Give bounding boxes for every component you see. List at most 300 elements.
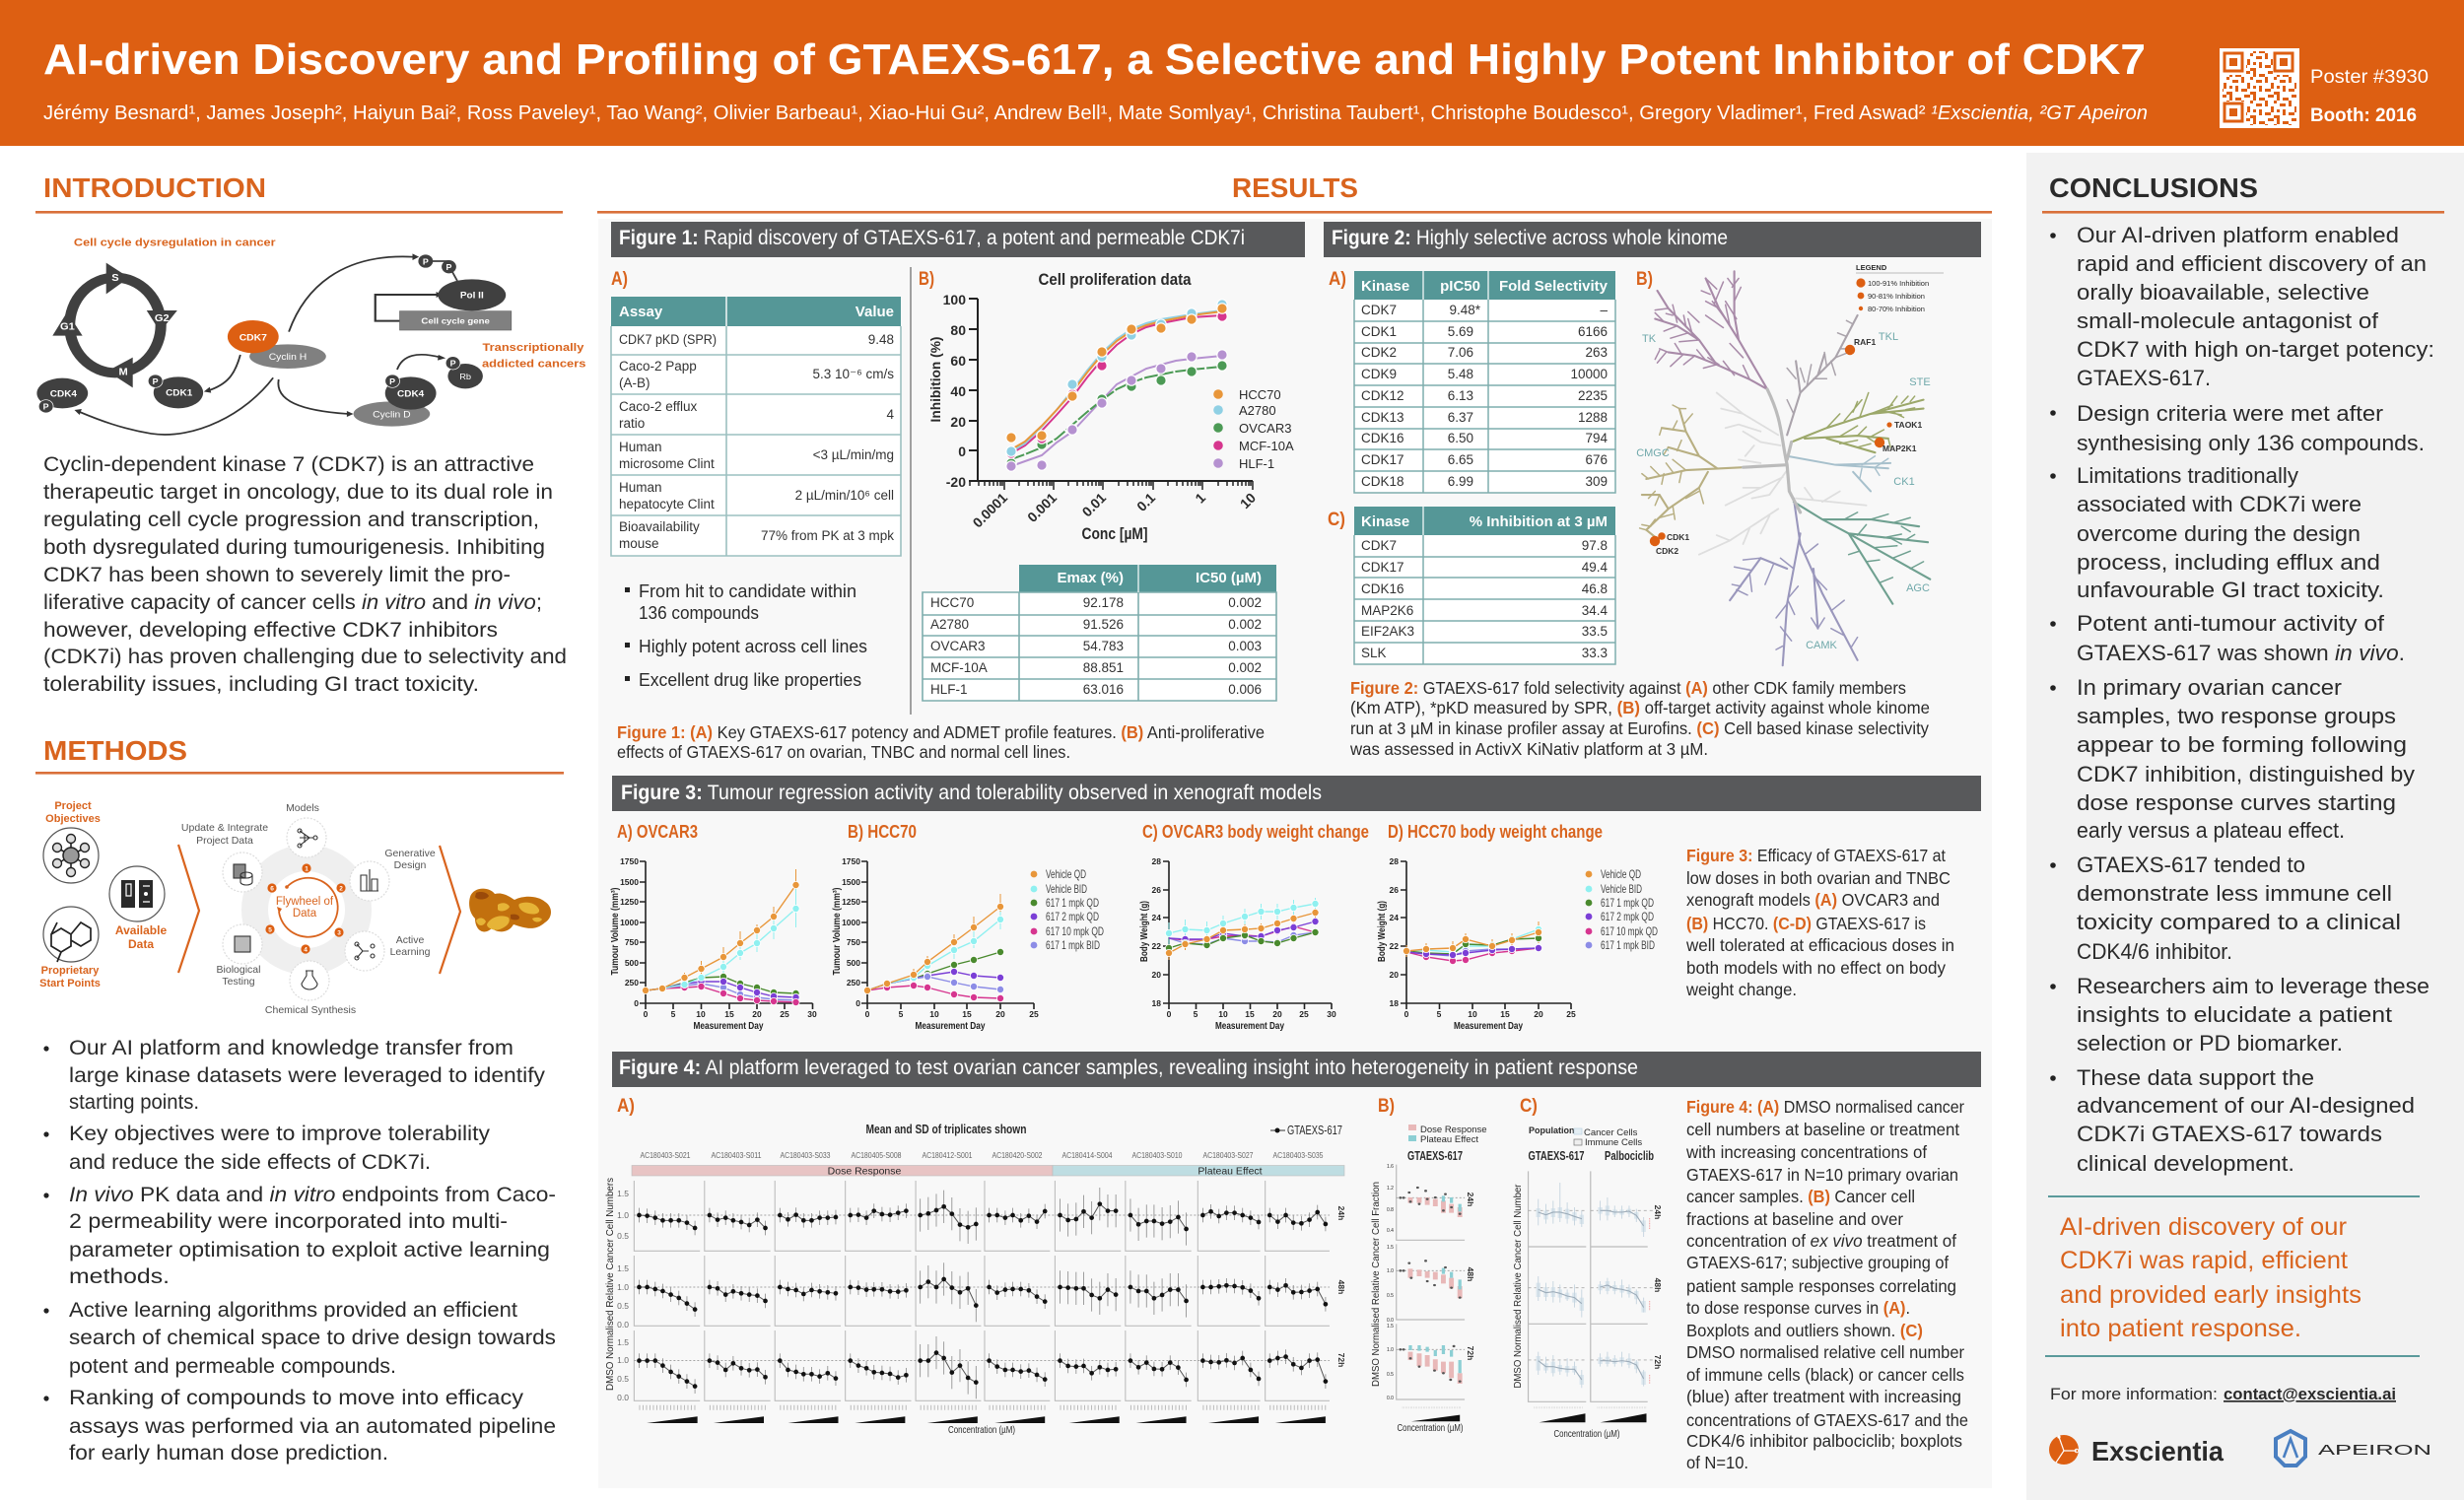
conclusions bullet list: toxicity compared to a clinical (2077, 910, 2401, 934)
kinase complexes: Cell cycle gene (421, 316, 490, 326)
flywheel step labels: Update & Integrate (181, 822, 268, 834)
flywheel: 4 (304, 946, 308, 954)
sample names: AC180403-S027 (1202, 1150, 1254, 1160)
figure 4 caption: GTAEXS-617 in N=10 primary ovarian (1686, 1165, 1958, 1185)
table: emax ic50: A2780 (930, 617, 969, 632)
chart: HCC70 tumour volume: 15 (962, 1009, 972, 1019)
methods bullet list: and reduce the side effects of CDK7i. (69, 1151, 431, 1174)
legend: tumour charts: 617 10 mpk QD (1046, 924, 1104, 938)
figure 2 header (1324, 222, 1981, 257)
table: emax ic50: Emax (%) (1057, 570, 1124, 586)
family labels (1636, 331, 1931, 651)
kinase complexes: Cyclin H (269, 352, 307, 363)
figure 4 caption: (blue) after treatment with increasing (1686, 1387, 1961, 1406)
figure 2 header: Figure 2: Highly selective across whole kinome (1332, 227, 1728, 249)
chart: HCC70 tumour volume: 0 (856, 998, 860, 1008)
table: kinase selectivity: 6.50 (1448, 431, 1473, 445)
callout: key message (2045, 1195, 2420, 1357)
table: emax ic50: 54.783 (1083, 639, 1124, 653)
figure 4 caption: GTAEXS-617; subjective grouping of (1686, 1253, 1949, 1272)
chart: OVCAR3 body weight: 10 (1218, 1009, 1228, 1019)
legend: body weight charts: 617 1 mpk BID (1601, 938, 1655, 952)
chart: cell proliferation: 80 (950, 322, 966, 338)
table: kinase selectivity: CDK13 (1361, 410, 1404, 425)
figure 4 header (612, 1052, 1981, 1087)
conclusions bullet list: samples, two response groups (2077, 704, 2396, 728)
chart: OVCAR3 body weight: 26 (1152, 885, 1161, 895)
boxplots B: Concentration (µM) (1398, 1423, 1463, 1434)
boxplots B: 0.5 (1387, 1293, 1394, 1299)
logo: Exscientia: Exscientia (2091, 1436, 2224, 1466)
chart: cell proliferation: 0.0001 (970, 490, 1010, 530)
chart: HCC70 body weight: Measurement Day (1454, 1021, 1523, 1032)
methods bullet list: Active learning algorithms provided an efficient (69, 1299, 517, 1322)
table: assay values: Caco-2 Papp (619, 359, 697, 374)
arrow: chevron right (440, 846, 460, 974)
table: kinase selectivity: 676 (1585, 452, 1608, 467)
figure 4 caption: DMSO normalised relative cell number (1686, 1342, 1964, 1362)
figure 3 caption: low doses in both ovarian and TNBC (1686, 868, 1951, 888)
chart: OVCAR3 tumour volume: 500 (625, 958, 639, 968)
key points: Highly potent across cell lines (639, 637, 867, 656)
hit kinases: CDK2 (1656, 546, 1678, 556)
figure 1 header: Figure 1: Rapid discovery of GTAEXS-617, a potent and permeable CDK7i (619, 227, 1245, 249)
figure 4 caption: with increasing concentrations of (1685, 1142, 1927, 1162)
methods bullet list: Key objectives were to improve tolerability (69, 1123, 491, 1145)
chart legend: HLF-1 (1239, 456, 1274, 471)
label C: C) (1328, 510, 1345, 530)
kinase complexes: P (450, 359, 456, 369)
flywheel step labels: Biological (217, 964, 260, 976)
response group bands (632, 1165, 1344, 1177)
hit kinases: MAP2K1 (1882, 443, 1917, 453)
chart: HCC70 body weight: 28 (1390, 856, 1399, 866)
chart: HCC70 tumour volume: 1000 (842, 918, 860, 927)
conclusions bullet list: Researchers aim to leverage these (2077, 974, 2430, 998)
boxplots C: 24h (1653, 1205, 1663, 1219)
methods bullet list: methods. (69, 1265, 170, 1288)
chart: OVCAR3 tumour volume: 250 (625, 978, 639, 988)
table: assay values: 77% from PK at 3 mpk (761, 528, 894, 543)
boxplot titles C: Palbociclib (1605, 1148, 1654, 1163)
facet axis labels: Concentration (µM) (948, 1424, 1015, 1436)
facet axis labels: 0.0 (617, 1320, 629, 1330)
diagram title: Cell cycle dysregulation in cancer (74, 236, 276, 248)
proprietary start points: Start Points (39, 978, 101, 989)
chart: HCC70 tumour volume: 5 (899, 1009, 904, 1019)
label B: B) (919, 269, 934, 290)
chart: HCC70 body weight: 15 (1500, 1009, 1510, 1019)
sub-headings (617, 822, 1603, 842)
chart: HCC70 tumour volume: 10 (929, 1009, 939, 1019)
figure 1 caption (617, 722, 1265, 762)
available data (109, 866, 167, 951)
logo: Apeiron: APEIRON (2318, 1442, 2431, 1459)
proprietary start points (39, 907, 101, 989)
kinase complexes: P (43, 402, 49, 412)
legend: body weight charts: Vehicle QD (1601, 867, 1641, 881)
table: percent inhibition: 33.5 (1582, 624, 1608, 639)
flywheel: Data (293, 908, 317, 920)
key points: 136 compounds (639, 603, 759, 623)
kinase complexes: CDK4 (50, 389, 78, 399)
conclusions bullet list: Design criteria were met after (2077, 401, 2383, 426)
table: percent inhibition: CDK7 (1361, 538, 1397, 553)
hit kinases: TAOK1 (1894, 420, 1922, 430)
chart: cell proliferation (927, 270, 1294, 543)
chart: HCC70 body weight (1377, 856, 1576, 1032)
flywheel: 1 (305, 865, 308, 873)
boxplots B: 0.0 (1387, 1396, 1394, 1401)
contact line: For more information: (2050, 1385, 2218, 1403)
table: emax ic50: 0.006 (1228, 682, 1262, 697)
table: emax ic50: IC50 (µM) (1196, 570, 1262, 586)
contact line (2050, 1385, 2396, 1403)
flywheel step labels: Chemical Synthesis (265, 1004, 356, 1016)
methods bullet list: assays was performed via an automated pipeline (69, 1415, 556, 1438)
methods bullet list: search of chemical space to drive design towards (69, 1327, 556, 1349)
chart: HCC70 tumour volume: Tumour Volume (mm³) (832, 887, 843, 976)
table: percent inhibition: 49.4 (1582, 560, 1608, 575)
hit kinases: CDK1 (1667, 532, 1689, 542)
flywheel step labels: Learning (390, 946, 431, 958)
chart: OVCAR3 tumour volume: 1000 (620, 918, 639, 927)
table: emax ic50: MCF-10A (930, 660, 988, 675)
table: kinase selectivity: CDK17 (1361, 452, 1404, 467)
chart: OVCAR3 tumour volume: 1750 (620, 856, 639, 866)
table: assay values: 9.48 (868, 332, 894, 347)
legend: tumour charts: Vehicle BID (1046, 882, 1087, 896)
figure 3 header: Figure 3: Tumour regression activity and tolerability observed in xenograft models (621, 782, 1322, 804)
facet axis labels: 0.5 (617, 1231, 629, 1241)
table: kinase selectivity: 2235 (1578, 388, 1608, 403)
chart: cell proliferation: 0.01 (1079, 490, 1109, 519)
table: emax ic50: 0.002 (1228, 660, 1262, 675)
chart: OVCAR3 tumour volume: 0 (634, 998, 639, 1008)
conclusions bullet list: early versus a plateau effect. (2077, 818, 2345, 843)
chart: HCC70 body weight: Body Weight (g) (1377, 901, 1388, 962)
facet axis labels: 0.5 (617, 1301, 629, 1311)
boxplots B: 0.0 (1387, 1318, 1394, 1324)
kinase complexes: CDK7 (240, 333, 267, 343)
hit kinases (1650, 337, 1922, 556)
kinome legend: 90-81% Inhibition (1868, 292, 1925, 301)
chart: cell proliferation: Conc [µM] (1082, 524, 1147, 543)
boxplot legend C: Cancer Cells (1584, 1127, 1638, 1138)
table: percent inhibition (1354, 507, 1615, 664)
methods bullet list: for early human dose prediction. (69, 1442, 388, 1465)
conclusions bullet list: insights to elucidate a patient (2077, 1002, 2392, 1027)
table: percent inhibition: MAP2K6 (1361, 603, 1413, 618)
conclusions bullet list: CDK7 inhibition, distinguished by (2077, 762, 2415, 786)
table: assay values: 5.3 10⁻⁶ cm/s (813, 367, 894, 381)
table: emax ic50: 63.016 (1083, 682, 1124, 697)
facet chart title: Mean and SD of triplicates shown (865, 1122, 1027, 1136)
transcriptionally addicted label (482, 342, 585, 370)
table: kinase selectivity: 5.48 (1448, 367, 1473, 381)
legend: body weight charts (1586, 867, 1658, 952)
response group bands: Dose Response (828, 1165, 902, 1177)
chart: OVCAR3 body weight: 18 (1152, 998, 1161, 1008)
table: kinase selectivity: 6.99 (1448, 474, 1473, 489)
chart: cell proliferation: Inhibition (%) (927, 337, 943, 422)
chart: OVCAR3 body weight: 15 (1245, 1009, 1255, 1019)
table: assay values: CDK7 pKD (SPR) (619, 332, 717, 347)
figure 1 caption: Figure 1: (A) Key GTAEXS-617 potency and ADMET profile features. (B) Anti-proliferative (617, 722, 1265, 742)
boxplots B: 0.8 (1387, 1207, 1394, 1213)
boxplot legend C: Population: (1529, 1125, 1577, 1135)
chart: OVCAR3 body weight: 22 (1152, 941, 1161, 951)
introduction paragraph: CDK7 has been shown to severely limit the pro- (43, 564, 511, 586)
legend: body weight charts: 617 10 mpk QD (1601, 924, 1658, 938)
table: percent inhibition: EIF2AK3 (1361, 624, 1414, 639)
sub-headings: B) HCC70 (848, 822, 917, 842)
table: assay values: microsome Clint (619, 456, 715, 471)
figure 3 header (612, 776, 1981, 811)
kinase complexes: P (153, 376, 159, 386)
family labels: AGC (1906, 582, 1930, 594)
boxplots B: 48h (1466, 1267, 1475, 1281)
table: assay values: Bioavailability (619, 519, 700, 534)
figure 4 caption: CDK4/6 inhibitor palbociclib; boxplots (1686, 1431, 1962, 1451)
conclusions bullet list: appear to be forming following (2077, 732, 2407, 757)
figure 4 caption: cell numbers at baseline or treatment (1686, 1120, 1959, 1139)
icon: molecule surface (469, 889, 551, 931)
legend: tumour charts: 617 1 mpk BID (1046, 938, 1100, 952)
figure 1 header (611, 222, 1305, 257)
flywheel: 3 (337, 930, 341, 936)
table: assay values: mouse (619, 536, 659, 551)
conclusions bullet list: GTAEXS-617 was shown in vivo. (2077, 641, 2405, 665)
chart: HCC70 tumour volume: Measurement Day (915, 1021, 986, 1032)
chart: HCC70 body weight: 10 (1468, 1009, 1477, 1019)
facet axis labels: 1.0 (617, 1210, 629, 1220)
table: emax ic50: 91.526 (1083, 617, 1124, 632)
chart: OVCAR3 body weight: 25 (1299, 1009, 1309, 1019)
conclusions bullet list: GTAEXS-617 tended to (2077, 852, 2305, 877)
table: assay values: 2 µL/min/10⁶ cell (795, 488, 894, 503)
boxplots B: 0.4 (1387, 1228, 1394, 1234)
conclusions bullet list: advancement of our AI-designed (2077, 1093, 2415, 1118)
chart: OVCAR3 tumour volume: 10 (696, 1009, 706, 1019)
cell cycle ring: S (111, 272, 119, 284)
label B: B) (1378, 1096, 1395, 1117)
callout: key message: CDK7i was rapid, efficient (2060, 1247, 2348, 1274)
table: emax ic50: 0.002 (1228, 595, 1262, 610)
figure 4 caption: concentration of ex vivo treatment of (1686, 1231, 1956, 1251)
chart legend (1213, 387, 1294, 471)
table: kinase selectivity: 1288 (1578, 410, 1608, 425)
table: kinase selectivity: CDK18 (1361, 474, 1404, 489)
chart: HCC70 tumour volume: 750 (847, 937, 860, 947)
conclusions bullet list: clinical development. (2077, 1151, 2294, 1176)
introduction paragraph: therapeutic target in oncology, due to its dual role in (43, 481, 553, 504)
conclusions bullet list: orally bioavailable, selective (2077, 280, 2369, 305)
facet axis labels: 1.0 (617, 1355, 629, 1365)
table: assay values: 4 (886, 407, 894, 422)
facet plots (634, 1181, 1330, 1423)
boxplots B: 1.6 (1387, 1164, 1394, 1170)
hit kinases: RAF1 (1854, 337, 1876, 347)
figure 4 caption: to dose response curves in (A). (1686, 1298, 1910, 1318)
cell cycle ring: G2 (155, 312, 170, 324)
facet axis labels: 48h (1336, 1280, 1346, 1294)
response group bands: Plateau Effect (1198, 1165, 1263, 1177)
boxplots B: 1.0 (1387, 1347, 1394, 1353)
conclusions bullet list: dose response curves starting (2077, 790, 2396, 815)
table: kinase selectivity: 794 (1585, 431, 1608, 445)
kinase complexes: P (389, 376, 395, 386)
conclusions bullet list: demonstrate less immune cell (2077, 881, 2392, 906)
table: kinase selectivity: Kinase (1361, 278, 1409, 295)
introduction paragraph: liferative capacity of cancer cells in vitro and in vivo; (43, 591, 542, 614)
conclusions bullet list: Potent anti-tumour activity of (2077, 611, 2385, 636)
chart: cell proliferation: 0 (958, 443, 966, 459)
boxplots C: DMSO Normalised Relative Cancer Cell Number (1513, 1184, 1524, 1388)
table: kinase selectivity: 9.48* (1449, 303, 1481, 317)
chart: cell proliferation: Cell proliferation data (1039, 270, 1192, 289)
table: emax ic50: HLF-1 (930, 682, 968, 697)
table: kinase selectivity: – (1600, 303, 1608, 317)
table: assay values: Human (619, 440, 662, 454)
chart: cell proliferation: 0.1 (1133, 490, 1158, 514)
callout: key message: into patient response. (2060, 1315, 2301, 1342)
table: kinase selectivity: 5.69 (1448, 324, 1473, 339)
figure 4 caption: of N=10. (1686, 1453, 1748, 1472)
conclusions bullet list (2050, 223, 2434, 1176)
chart: OVCAR3 body weight: 20 (1272, 1009, 1282, 1019)
family labels: CAMK (1806, 640, 1838, 651)
project objectives (43, 800, 101, 883)
table: percent inhibition: 97.8 (1582, 538, 1608, 553)
chart: HCC70 body weight: 5 (1437, 1009, 1442, 1019)
table: assay values (611, 297, 901, 556)
facet legend (1270, 1123, 1342, 1137)
key points: From hit to candidate within (639, 581, 856, 601)
chart: cell proliferation: 1 (1192, 490, 1208, 507)
table: assay values: Assay (619, 304, 663, 320)
figure 3 caption (1685, 846, 1954, 999)
boxplot titles C: GTAEXS-617 (1528, 1148, 1585, 1163)
kinase complexes: Rb (459, 372, 471, 381)
sample names (641, 1150, 1324, 1160)
transcriptionally addicted label: addicted cancers (482, 358, 585, 370)
conclusions bullet list: Limitations traditionally (2077, 463, 2298, 488)
QR code (2220, 48, 2299, 128)
boxplots B: 1.0 (1387, 1268, 1394, 1274)
kinase complexes: P (423, 257, 429, 266)
chart: OVCAR3 tumour volume: 1500 (620, 877, 639, 887)
chart legend: OVCAR3 (1239, 421, 1291, 436)
table: emax ic50: OVCAR3 (930, 639, 986, 653)
table: assay values: ratio (619, 416, 645, 431)
sample names: AC180403-S010 (1131, 1150, 1183, 1160)
methods bullet list (43, 1037, 556, 1465)
kinome legend: 80-70% Inhibition (1868, 305, 1925, 313)
conclusions bullet list: process, including efflux and (2077, 550, 2380, 575)
boxplots C: 72h (1653, 1355, 1663, 1369)
facet axis labels: 1.5 (617, 1263, 629, 1273)
chart: OVCAR3 body weight: 28 (1152, 856, 1161, 866)
family labels: TKL (1879, 331, 1898, 343)
table: assay values: Value (856, 304, 894, 320)
callout: key message: and provided early insights (2060, 1281, 2361, 1309)
chart: OVCAR3 tumour volume: 20 (752, 1009, 762, 1019)
flywheel step labels: Active (396, 934, 424, 946)
facet axis labels: DMSO Normalised Relative Cancer Cell Numbers (605, 1178, 616, 1391)
sub-headings: C) OVCAR3 body weight change (1142, 822, 1369, 842)
chart: OVCAR3 tumour volume: 0 (644, 1009, 649, 1019)
conclusions bullet list: small-molecule antagonist of (2077, 308, 2379, 333)
table: kinase selectivity: CDK16 (1361, 431, 1404, 445)
chart: HCC70 body weight: 25 (1566, 1009, 1576, 1019)
kinase complexes: P (446, 262, 452, 272)
available data: Available (115, 923, 167, 937)
sub-headings: D) HCC70 body weight change (1388, 822, 1603, 842)
table: assay values: Caco-2 efflux (619, 399, 698, 414)
boxplots C: 48h (1653, 1278, 1663, 1292)
sample names: AC180403-S011 (712, 1150, 762, 1160)
table: kinase selectivity: CDK12 (1361, 388, 1404, 403)
kinome legend: LEGEND (1856, 263, 1887, 272)
table: kinase selectivity: CDK7 (1361, 303, 1397, 317)
cell cycle ring: G1 (60, 321, 75, 332)
figure 4 header: Figure 4: AI platform leveraged to test ovarian cancer samples, revealing insight into heterogeneity in patient response (619, 1057, 1638, 1079)
boxplots C: Concentration (µM) (1553, 1429, 1620, 1440)
sample names: AC180420-S002 (992, 1150, 1043, 1160)
figure 3 caption: well tolerated at efficacious doses in (1685, 935, 1954, 955)
chart: OVCAR3 tumour volume: 1250 (620, 897, 639, 907)
table: kinase selectivity: Fold Selectivity (1499, 278, 1608, 295)
boxplots C (1513, 1171, 1663, 1440)
chart: OVCAR3 body weight: 5 (1194, 1009, 1198, 1019)
chart: cell proliferation: 20 (950, 414, 966, 430)
chart: OVCAR3 body weight: 30 (1327, 1009, 1336, 1019)
figure 3 caption: xenograft models (A) OVCAR3 and (1686, 890, 1940, 910)
boxplots B: 72h (1466, 1346, 1475, 1360)
boxplot legend C: Immune Cells (1585, 1137, 1642, 1148)
kinase complexes: Pol II (460, 291, 484, 301)
methods bullet list: In vivo PK data and in vitro endpoints from Caco- (69, 1184, 556, 1206)
kinome legend (1856, 263, 1944, 313)
heading: conclusions: CONCLUSIONS (2049, 172, 2258, 203)
table: percent inhibition: 33.3 (1582, 646, 1608, 660)
arrow: chevron left (178, 845, 199, 973)
boxplots B: 1.5 (1387, 1324, 1394, 1330)
methods bullet list: 2 permeability were incorporated into multi- (69, 1210, 508, 1233)
kinase complexes (36, 254, 512, 427)
table: emax ic50: HCC70 (930, 595, 974, 610)
panel: figure 3 (610, 776, 1981, 1032)
family labels: TK (1642, 333, 1657, 345)
flywheel step labels (181, 802, 436, 1016)
family labels: STE (1909, 376, 1931, 388)
table: kinase selectivity: 309 (1585, 474, 1608, 489)
facet axis labels: 0.0 (617, 1393, 629, 1402)
table: kinase selectivity: CDK2 (1361, 345, 1397, 360)
chart: OVCAR3 tumour volume (610, 856, 817, 1032)
table: kinase selectivity (1354, 271, 1615, 493)
figure 1 caption: effects of GTAEXS-617 on ovarian, TNBC and normal cell lines. (617, 742, 1070, 762)
boxplots B: 0.5 (1387, 1372, 1394, 1378)
legend: tumour charts: Vehicle QD (1046, 867, 1086, 881)
poster number: Poster #3930 (2310, 67, 2429, 88)
chart: HCC70 body weight: 20 (1534, 1009, 1543, 1019)
chart: HCC70 tumour volume: 1250 (842, 897, 860, 907)
sample names: AC180403-S035 (1273, 1150, 1324, 1160)
table: kinase selectivity: 263 (1585, 345, 1608, 360)
panel: figure 1 (611, 222, 1305, 762)
